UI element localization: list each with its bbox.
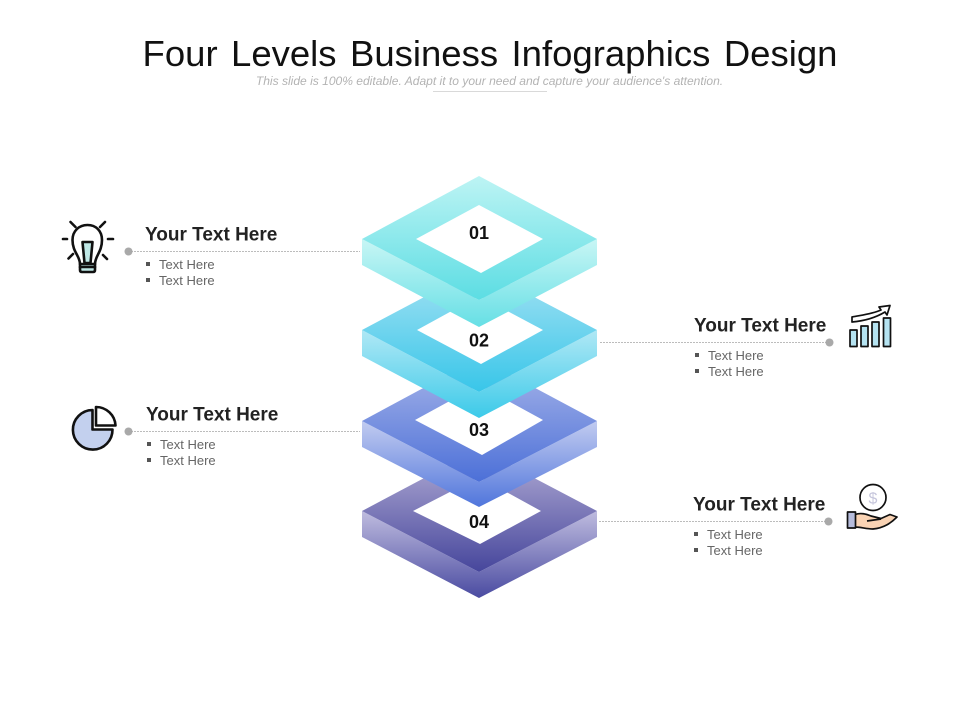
title: Four Levels Business Infographics Design <box>143 33 837 74</box>
layer 03 <box>362 358 597 507</box>
text block: level 3 <box>146 404 278 468</box>
text block: level 1 <box>145 224 277 288</box>
text block: level 4: Text Here <box>707 543 763 558</box>
text block: level 4 <box>693 494 825 558</box>
connector: level 3 <box>124 428 360 436</box>
icon: bar chart with arrow <box>850 306 890 346</box>
icon: hand with coin: $ <box>869 490 878 508</box>
text block: level 3: Text Here <box>160 437 216 452</box>
connector: level 1 <box>124 248 360 256</box>
number 03: 03 <box>469 420 489 440</box>
number 02: 02 <box>469 330 489 350</box>
connector: level 4 <box>599 518 832 526</box>
layer 01 <box>362 176 597 327</box>
icon: pie chart <box>73 407 116 450</box>
number 01: 01 <box>469 223 489 243</box>
text block: level 1: Text Here <box>159 273 215 288</box>
text block: level 2: Text Here <box>708 348 764 363</box>
text block: level 4: Text Here <box>707 527 763 542</box>
text block: level 3: Your Text Here <box>146 404 278 426</box>
layer 02 <box>362 268 597 418</box>
icon: light bulb <box>63 222 113 272</box>
text block: level 1: Your Text Here <box>145 224 277 246</box>
text block: level 2 <box>694 316 826 379</box>
connector: level 2 <box>600 338 834 346</box>
text block: level 3: Text Here <box>160 453 216 468</box>
number 04: 04 <box>469 512 489 532</box>
layer 04 <box>362 449 597 598</box>
icon: hand with coin <box>848 484 897 529</box>
text block: level 4: Your Text Here <box>693 494 825 516</box>
text block: level 2: Text Here <box>708 364 764 379</box>
text block: level 2: Your Text Here <box>694 316 826 336</box>
subtitle: This slide is 100% editable. Adapt it to your need and capture your audience's attention. <box>256 74 723 88</box>
text block: level 1: Text Here <box>159 257 215 272</box>
